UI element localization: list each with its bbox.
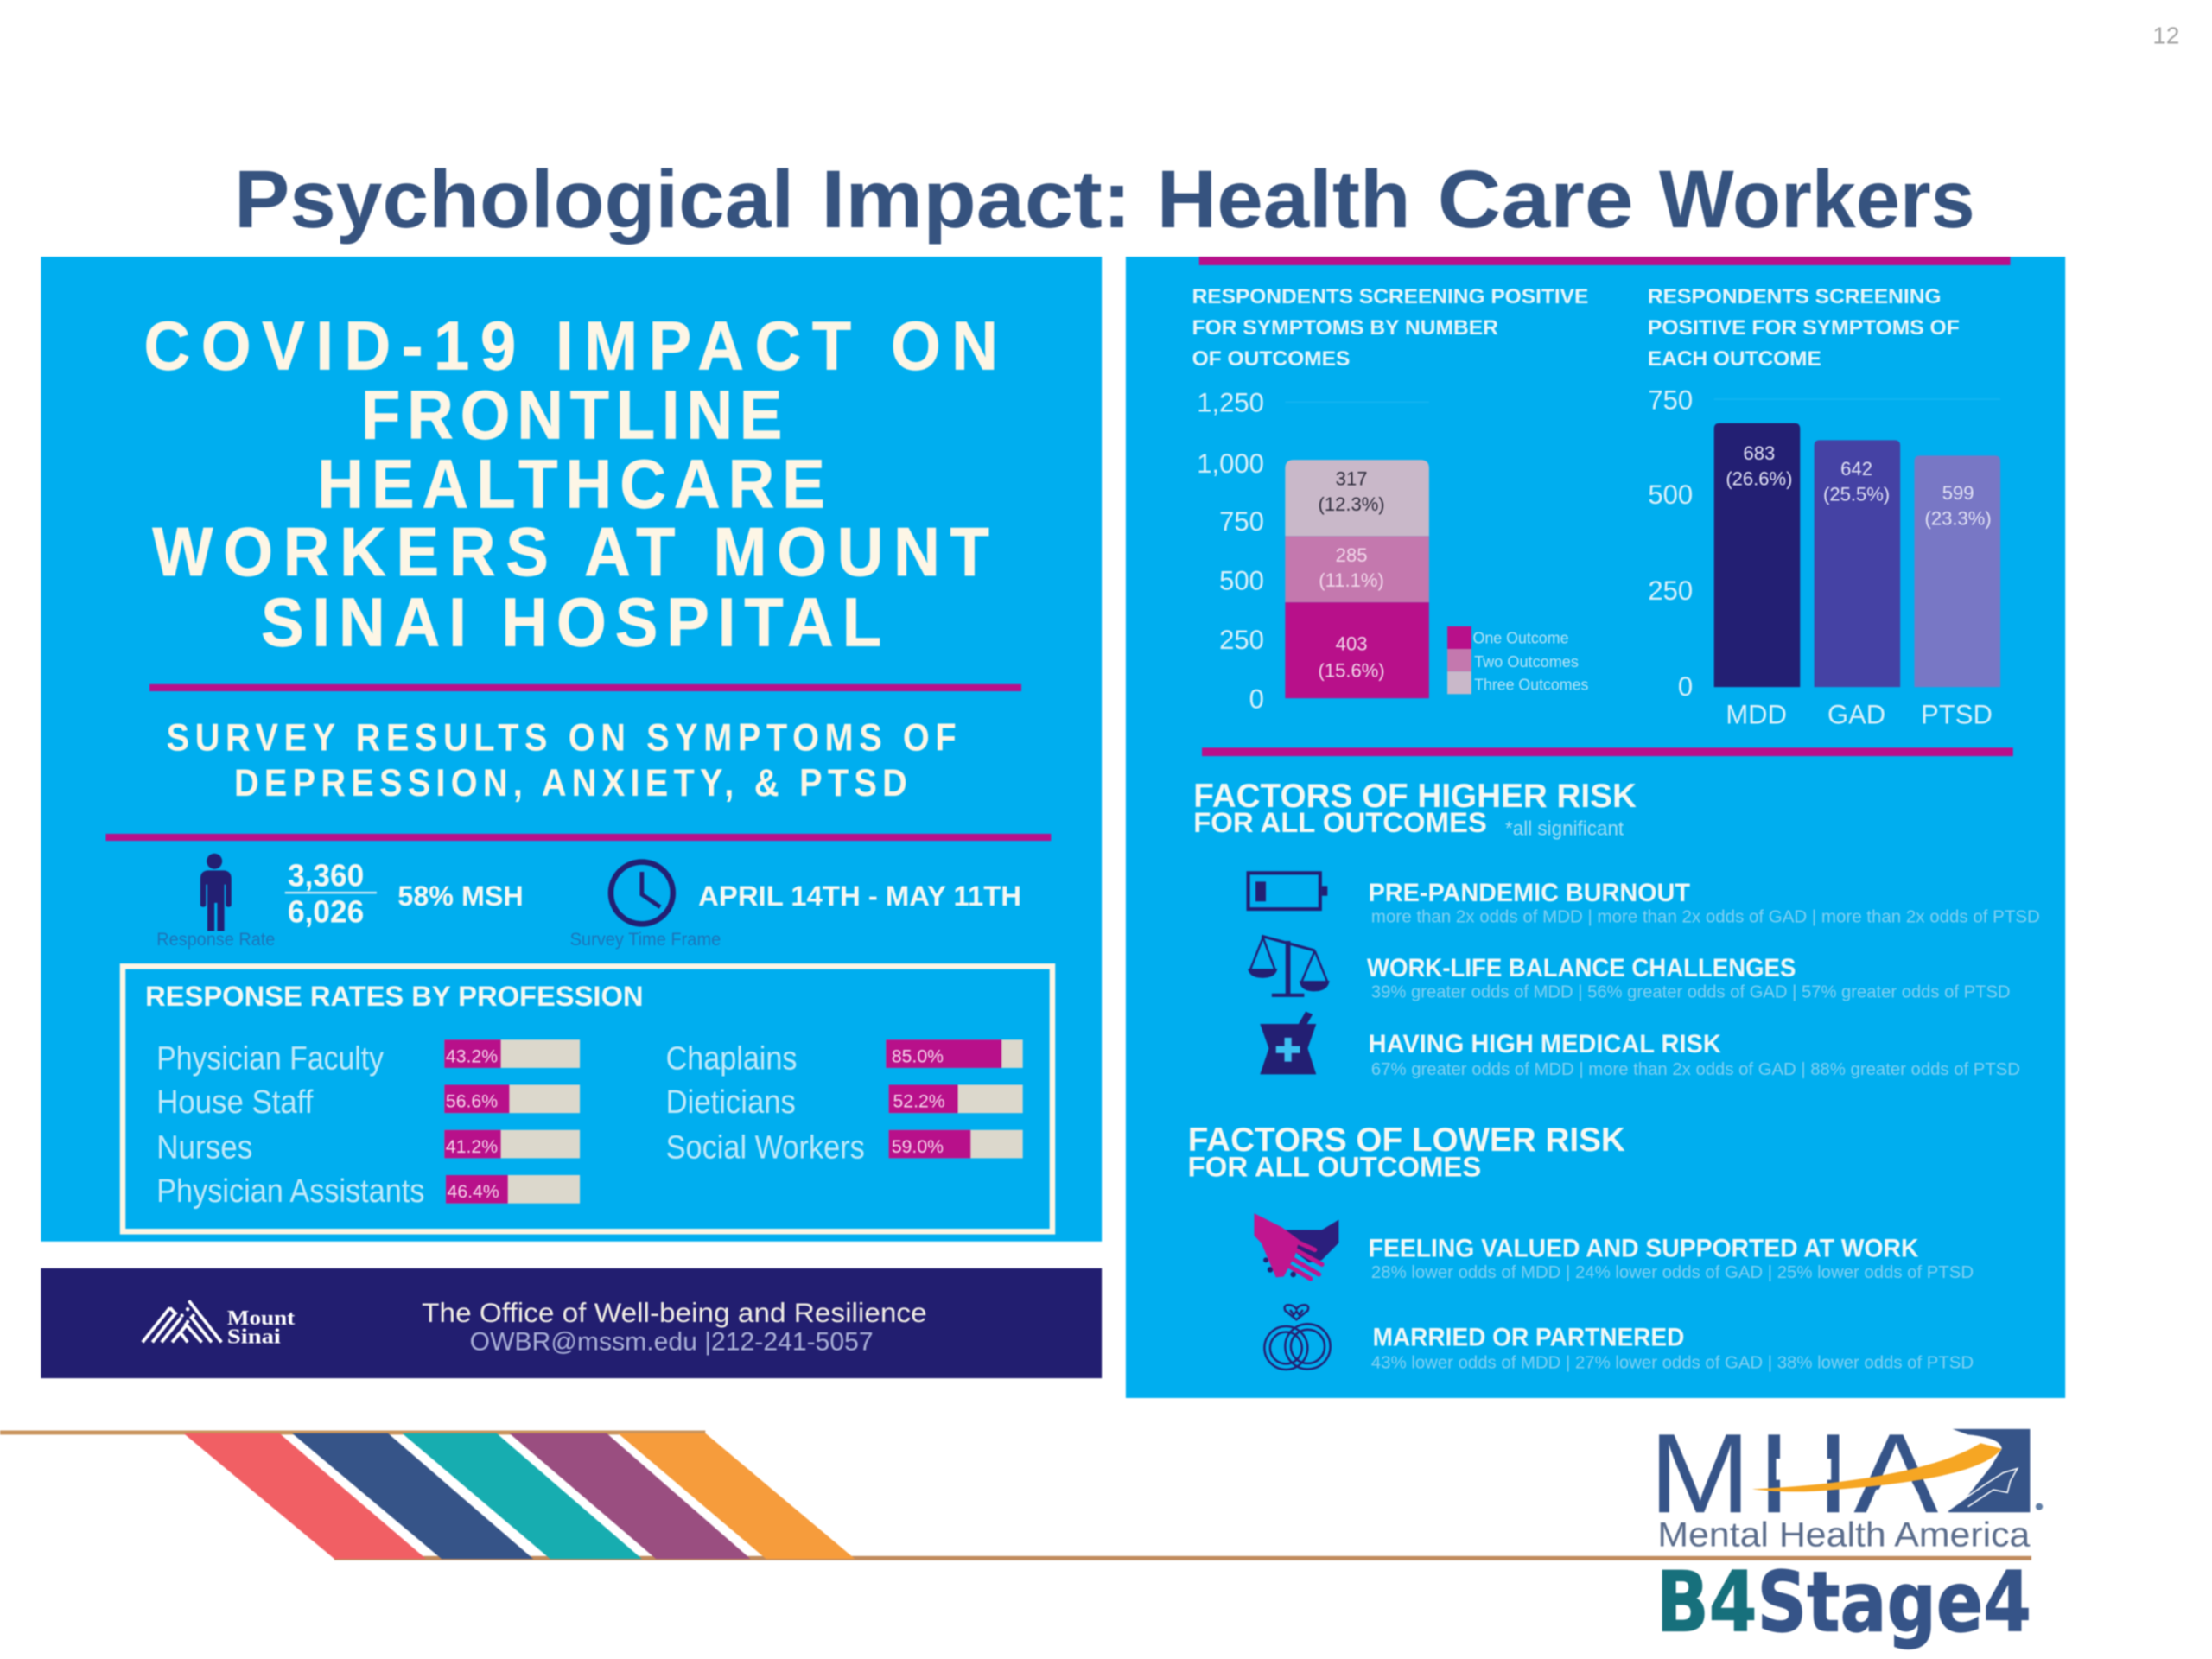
factor: married or partnered: 43% lower odds of MDD | 27% lower odds of GAD | 38% lower odds of PTSD: [1371, 1354, 1974, 1373]
infographic heading: SINAI HOSPITAL: [261, 584, 881, 661]
bar: nurses: Nurses: [156, 1128, 252, 1165]
bar: dieticians: [666, 1084, 1023, 1120]
factor: burnout: more than 2x odds of MDD | more than 2x odds of GAD | more than 2x odds of PTSD: [1371, 908, 2040, 927]
stacked bar chart: [1197, 388, 1588, 715]
logo: Mental Health America: A: [1853, 1410, 1938, 1536]
survey dates: APRIL 14TH - MAY 11TH: [698, 880, 1021, 912]
factor: medical risk: 67% greater odds of MDD | more than 2x odds of GAD | 88% greater odds of PTSD: [1371, 1060, 2020, 1079]
response rate fraction: 6,026: [288, 894, 364, 930]
logo: Mount Sinai: [143, 1300, 296, 1348]
icon: handshake: [1254, 1213, 1338, 1279]
heading: factors of higher risk: FACTORS OF HIGHER RISK: [1193, 778, 1637, 815]
icon: wedding rings: [1264, 1305, 1331, 1370]
bar: social workers: Social Workers: [666, 1128, 865, 1165]
heading: factors of higher risk: [1193, 778, 1637, 838]
title: [234, 154, 1975, 245]
bar: physician faculty: 43.2%: [446, 1046, 498, 1066]
legend: Two Outcomes: [1474, 652, 1579, 671]
response rate fraction: 3,360: [288, 857, 364, 893]
chart heading: each outcome: [1648, 285, 1960, 371]
chart heading: by number of outcomes: OF OUTCOMES: [1192, 347, 1350, 371]
bar: house staff: [156, 1084, 580, 1120]
stacked bar chart: 1,000: [1197, 448, 1264, 479]
legend: [1447, 626, 1588, 694]
logo: Mount Sinai: Sinai: [227, 1325, 281, 1348]
bar: nurses: 41.2%: [446, 1137, 498, 1157]
title: Workers: [1659, 154, 1975, 245]
heading: factors of lower risk: FACTORS OF LOWER RISK: [1188, 1122, 1625, 1159]
bar: social workers: 59.0%: [892, 1137, 944, 1157]
chart heading: each outcome: RESPONDENTS SCREENING: [1648, 285, 1942, 308]
factor: valued and supported: [1369, 1235, 1974, 1282]
bar: dieticians: 52.2%: [893, 1092, 945, 1112]
stacked bar chart: 403: [1336, 633, 1367, 655]
bar chart: (26.6%): [1726, 468, 1792, 490]
chart heading: by number of outcomes: FOR SYMPTOMS BY NUMBER: [1192, 316, 1498, 340]
factor: valued and supported: FEELING VALUED AND SUPPORTED AT WORK: [1369, 1235, 1918, 1263]
chart heading: each outcome: EACH OUTCOME: [1648, 347, 1821, 371]
page number: 12: [2152, 22, 2179, 49]
infographic heading: WORKERS AT MOUNT: [152, 514, 989, 591]
stacked bar chart: (12.3%): [1319, 493, 1385, 515]
stacked bar chart: 1,250: [1197, 388, 1264, 418]
title: Health: [1157, 154, 1411, 245]
bar chart: 500: [1648, 480, 1693, 510]
bar chart: GAD: [1827, 700, 1885, 730]
stacked bar chart: 285: [1336, 544, 1367, 566]
caption: response rate: Response Rate: [156, 930, 275, 950]
factor: burnout: [1369, 879, 2040, 927]
response share: 58% MSH: [397, 880, 524, 912]
infographic heading: [144, 308, 998, 661]
bar chart: (23.3%): [1925, 507, 1992, 529]
bar: chaplains: 85.0%: [892, 1046, 944, 1066]
response rate fraction: [285, 857, 377, 930]
bar: dieticians: Dieticians: [666, 1084, 796, 1120]
subheading: DEPRESSION, ANXIETY, & PTSD: [234, 761, 907, 804]
stacked bar chart: 750: [1219, 506, 1264, 537]
title: Psychological: [234, 154, 794, 245]
factor: work-life balance: 39% greater odds of MDD | 56% greater odds of GAD | 57% greater odds of PTSD: [1371, 982, 2011, 1001]
bar chart: (25.5%): [1823, 484, 1890, 505]
panel: response rates by profession: [123, 966, 1052, 1231]
panel: results: [1126, 257, 2065, 1398]
icon: low battery: [1249, 873, 1327, 909]
factor: medical risk: [1369, 1030, 2020, 1079]
panel: survey overview: [41, 257, 1102, 1242]
chart heading: by number of outcomes: RESPONDENTS SCREENING POSITIVE: [1192, 285, 1588, 308]
stacked bar chart: 250: [1219, 625, 1264, 655]
infographic heading: COVID-19 IMPACT ON: [144, 308, 998, 385]
factor: married or partnered: [1371, 1324, 1974, 1373]
bar: chaplains: [666, 1039, 1023, 1077]
logo: Mount Sinai: Mount: [227, 1306, 296, 1330]
title: Care: [1438, 154, 1634, 245]
subheading: [167, 716, 957, 804]
bar: nurses: [156, 1128, 580, 1165]
stacked bar chart: (11.1%): [1319, 569, 1384, 591]
bar chart: 642: [1840, 458, 1872, 480]
chart heading: by number of outcomes: [1192, 285, 1588, 371]
note: all significant: *all significant: [1505, 817, 1624, 840]
bar chart: 750: [1648, 385, 1693, 415]
caption: survey time frame: Survey Time Frame: [570, 930, 721, 950]
infographic heading: FRONTLINE: [361, 377, 782, 454]
logo: Mental Health America: Mental Health America: [1657, 1516, 2031, 1554]
bar: chaplains: Chaplains: [666, 1040, 797, 1077]
chart heading: each outcome: POSITIVE FOR SYMPTOMS OF: [1648, 316, 1960, 340]
decorative stripes: [0, 1431, 2031, 1560]
subheading: SURVEY RESULTS ON SYMPTOMS OF: [167, 716, 957, 759]
bar: physician assistants: 46.4%: [448, 1182, 499, 1202]
factor: work-life balance: [1367, 954, 2011, 1001]
bar chart: [1648, 385, 2000, 730]
stacked bar chart: (15.6%): [1319, 660, 1385, 682]
legend: Three Outcomes: [1474, 675, 1588, 693]
stacked bar chart: 317: [1336, 468, 1367, 490]
panel: contact footer: [41, 1268, 1102, 1378]
bar: social workers: [666, 1128, 1023, 1165]
icon: clock: [611, 862, 673, 924]
bar: physician assistants: [156, 1173, 580, 1209]
heading: factors of higher risk: FOR ALL OUTCOMES: [1193, 806, 1487, 838]
infographic heading: HEALTHCARE: [317, 446, 825, 523]
stacked bar chart: 500: [1219, 565, 1264, 595]
heading: factors of lower risk: FOR ALL OUTCOMES: [1188, 1151, 1481, 1183]
icon: person: [200, 854, 232, 931]
factor: burnout: PRE-PANDEMIC BURNOUT: [1369, 879, 1690, 907]
heading: factors of lower risk: [1188, 1122, 1625, 1183]
icon: scales: [1249, 936, 1328, 995]
stacked bar chart: 0: [1249, 684, 1264, 715]
logo: Mental Health America: [1649, 1410, 2043, 1554]
office name: The Office of Well-being and Resilience: [422, 1298, 927, 1328]
icon: mortar and pestle: [1260, 1012, 1316, 1074]
contact details: OWBR@mssm.edu |212-241-5057: [470, 1327, 874, 1356]
response rates heading: RESPONSE RATES BY PROFESSION: [145, 980, 643, 1012]
bar: physician faculty: [156, 1039, 580, 1077]
logo: Mental Health America: M: [1649, 1410, 1751, 1536]
bar chart: 683: [1744, 442, 1775, 464]
bar chart: MDD: [1726, 700, 1787, 730]
bar chart: 599: [1942, 482, 1974, 504]
title: Impact:: [821, 154, 1131, 245]
bar: house staff: 56.6%: [446, 1092, 498, 1112]
logo: B4Stage4: B4Stage4: [1656, 1554, 2031, 1650]
factor: work-life balance: WORK-LIFE BALANCE CHALLENGES: [1367, 954, 1796, 982]
bar chart: 0: [1678, 671, 1693, 702]
bar chart: PTSD: [1921, 700, 1993, 730]
logo: Mental Health America: H: [1758, 1410, 1849, 1536]
factor: married or partnered: MARRIED OR PARTNERED: [1373, 1324, 1684, 1352]
bar: physician faculty: Physician Faculty: [156, 1040, 384, 1077]
bar chart: 250: [1648, 575, 1693, 606]
legend: One Outcome: [1472, 628, 1569, 646]
bar: house staff: House Staff: [156, 1084, 314, 1120]
factor: medical risk: HAVING HIGH MEDICAL RISK: [1369, 1030, 1721, 1058]
bar: physician assistants: Physician Assistants: [156, 1173, 424, 1209]
factor: valued and supported: 28% lower odds of MDD | 24% lower odds of GAD | 25% lower odds of PTSD: [1371, 1263, 1974, 1282]
